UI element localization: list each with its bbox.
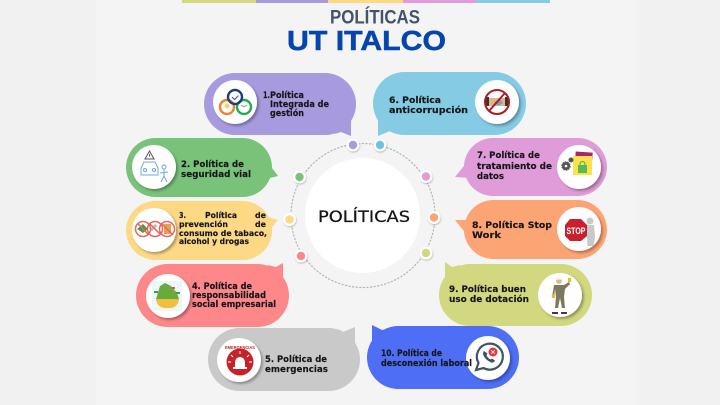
ring connector dots: [283, 138, 440, 262]
panel: 8 Política Stop Work: [455, 200, 607, 259]
text: uso de dotación: [449, 294, 529, 305]
text: seguridad vial: [181, 170, 251, 180]
icon: data folders, gears and padlock: [562, 151, 593, 175]
central dotted ring: [291, 144, 435, 288]
text: [181, 160, 251, 180]
text: datos: [477, 172, 504, 182]
text: 4. Política de: [192, 282, 252, 292]
icon: hands holding green earth: [152, 281, 182, 311]
text: 7. Política de: [477, 151, 540, 161]
icon: stop sign and figure: [565, 218, 595, 246]
text: [389, 96, 468, 116]
text: 5. Política de: [265, 355, 327, 365]
text: Política: [270, 91, 304, 101]
text: [477, 151, 552, 182]
text: [192, 282, 276, 310]
text: tratamiento de: [477, 162, 552, 172]
top colour stripe: [182, 0, 550, 3]
text: 9. Política buen: [449, 285, 526, 295]
panel: 2 Política de seguridad vial: [126, 138, 278, 197]
text: 8. Política Stop: [472, 221, 553, 231]
icon: emergency siren: [225, 345, 255, 376]
text: de: [255, 211, 267, 220]
panel: 9 Política buen uso de dotación: [439, 262, 592, 326]
text: prevención: [179, 219, 228, 229]
icon: emergency siren: EMERGENCIAS: [225, 345, 255, 350]
text: [449, 285, 529, 305]
text: social empresarial: [192, 300, 276, 310]
text: 2. Política de: [181, 160, 244, 170]
panel: 7 Política de tratamiento de datos: [455, 138, 607, 196]
panel: 10 Política de desconexión laboral: [367, 325, 519, 389]
text: desconexión laboral: [381, 358, 472, 369]
icon: prohibited tobacco, alcohol, drugs: [136, 222, 174, 236]
icon: messaging phone with red x: [476, 344, 503, 370]
icon: worker in uniform: [552, 278, 571, 314]
text: [472, 221, 553, 241]
text: Integrada de: [270, 100, 329, 110]
central label: POLÍTICAS: [318, 207, 410, 226]
text: 6. Política: [389, 96, 441, 106]
icon: stop sign and figure: STOP: [566, 226, 586, 237]
title: POLÍTICAS: POLÍTICAS: [330, 6, 420, 28]
text: Política: [205, 211, 237, 220]
text: [381, 349, 472, 369]
text: [263, 91, 329, 119]
text: consumo de tabaco,: [179, 229, 267, 238]
text: alcohol y drogas: [179, 237, 249, 246]
central circle: [305, 158, 420, 273]
text: responsabilidad: [192, 291, 266, 301]
panel: 6 Política anticorrupción: [373, 72, 526, 136]
text: gestión: [270, 108, 304, 119]
text: Work: [472, 231, 502, 241]
icon: car and pedestrian: [141, 151, 168, 182]
title: UT ITALCO: UT ITALCO: [287, 25, 446, 56]
panel: 1 Política Integrada de gestión: [204, 73, 356, 136]
text: 1.: [263, 91, 270, 101]
panel: 3 Política de prevención de consumo: [126, 201, 278, 260]
text: [179, 211, 267, 246]
text: [265, 355, 328, 375]
text: 3.: [179, 211, 186, 220]
icon: crossed handshake: [485, 90, 509, 114]
panel: 4 Política de responsabilidad social empresarial: [136, 263, 289, 327]
text: de: [255, 220, 267, 229]
icon: three linked rings: [220, 90, 251, 114]
text: anticorrupción: [389, 105, 468, 116]
text: emergencias: [265, 365, 328, 375]
text: 10. Política de: [381, 349, 442, 359]
panel: 5 Política de emergencias: [208, 327, 360, 391]
